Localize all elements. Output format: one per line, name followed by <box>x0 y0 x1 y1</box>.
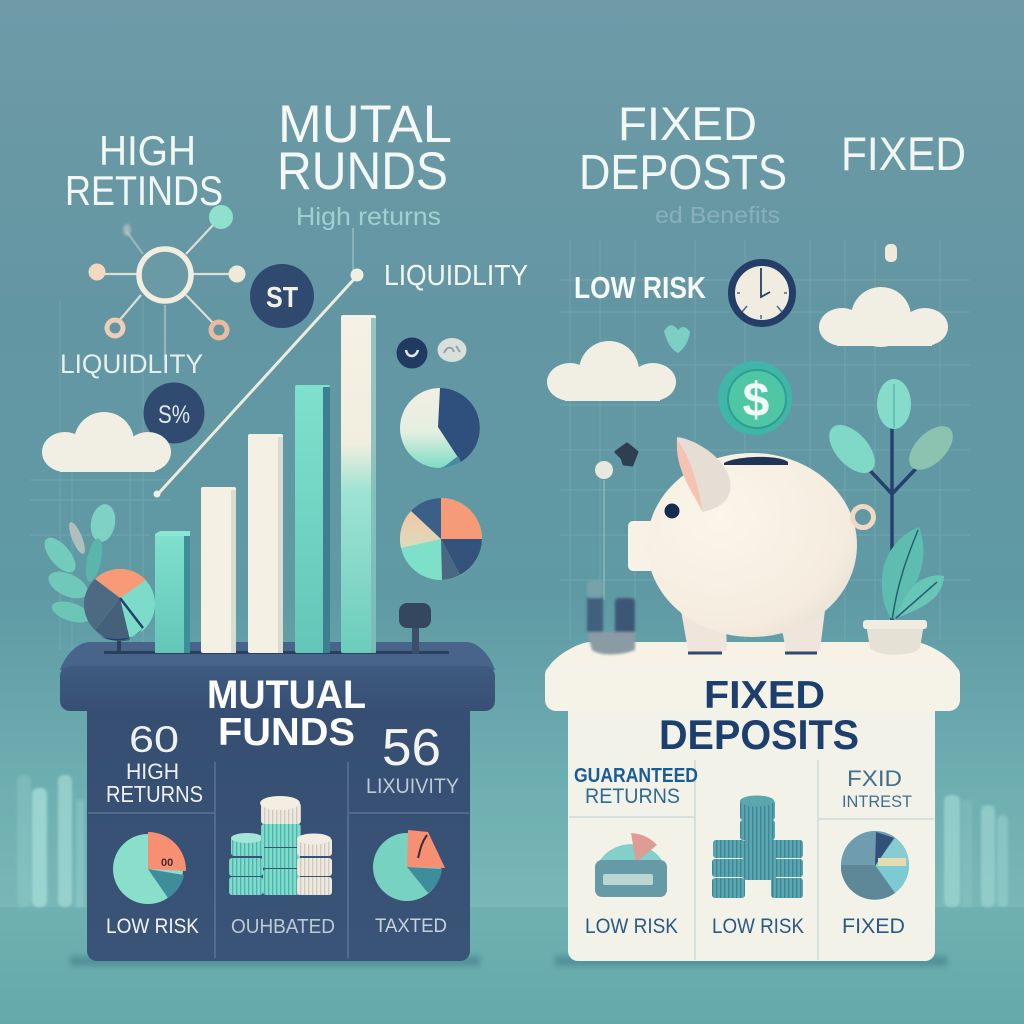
bar 4 <box>295 385 330 653</box>
pedestal floor shadow <box>70 956 480 966</box>
title: mutual funds <box>207 673 366 754</box>
labels: bottom row: OUHBATED <box>231 916 335 938</box>
pig ear <box>677 437 730 512</box>
title: mutual funds: MUTUAL <box>207 673 366 717</box>
panel: mutual funds upper area <box>39 95 528 654</box>
title: fixed deposits: FIXED <box>704 674 825 717</box>
heading: fixed deposits <box>579 97 787 200</box>
pedestal box <box>87 700 470 961</box>
pie chart: fixed <box>841 831 909 900</box>
coin slot <box>724 457 788 465</box>
heading: fixed deposits: FIXED <box>618 97 757 150</box>
floor band <box>0 907 1024 1024</box>
cloud right <box>819 287 948 347</box>
pie chart: taxed <box>373 830 445 901</box>
stat: guaranteed returns <box>574 765 698 808</box>
icon: bottles <box>587 580 635 654</box>
stat: guaranteed returns: GUARANTEED <box>574 765 698 787</box>
stat: fixed interest: INTREST <box>842 792 912 811</box>
labels: bottom row <box>585 915 905 938</box>
icon: safe with pie <box>595 833 667 897</box>
stat: 56 liquidity: LIXUIVITY <box>366 775 459 798</box>
coin stacks: left panel <box>229 796 332 895</box>
icon: small drop <box>885 244 897 262</box>
icon: dollar badge top <box>250 264 314 328</box>
bar 2 <box>201 487 236 653</box>
labels: bottom row <box>106 915 447 938</box>
pie chart upper right <box>400 388 480 468</box>
label: low risk: LOW RISK <box>574 270 707 305</box>
bar chart <box>155 315 376 653</box>
stat: 56 liquidity <box>366 719 459 798</box>
pie chart: low risk <box>113 832 186 904</box>
trend line <box>154 228 364 498</box>
stat: 60 high returns: HIGH <box>126 759 179 784</box>
heading: fixed deposits: DEPOSTS <box>579 146 787 200</box>
icon: dollar coin <box>718 361 792 435</box>
signpost <box>399 603 431 654</box>
stat: 56 liquidity: 56 <box>382 719 441 777</box>
heading: mutual runds: RUNDS <box>277 142 448 201</box>
bar 5 <box>341 315 376 653</box>
panel: mutual funds pedestal <box>60 642 495 966</box>
labels: bottom row: LOW RISK <box>106 915 199 938</box>
pig inner ear <box>677 440 702 511</box>
heading: high returns: RETINDS <box>65 167 223 214</box>
labels: bottom row: LOW RISK <box>712 915 804 938</box>
pedestal shadow line <box>104 651 449 654</box>
icon: dollar badge lower <box>144 382 204 444</box>
icon: small dark badge <box>396 338 428 368</box>
pedestal top surface <box>548 642 957 690</box>
icon: dollar badge lower: S% <box>158 401 190 429</box>
icon: network diagram <box>88 205 246 360</box>
icon: small heart <box>664 325 690 353</box>
cloud left <box>42 412 171 472</box>
subheading: fixed benefits: ed Benefits <box>655 202 780 228</box>
pig eye <box>664 504 680 518</box>
piggy bank <box>628 437 874 654</box>
plant right <box>821 379 961 620</box>
heading: fixed right: FIXED <box>841 127 966 180</box>
pig feet shadow <box>688 652 817 654</box>
background grid and faint bars <box>17 240 1008 907</box>
stat: fixed interest <box>842 766 912 811</box>
title: mutual funds: FUNDS <box>218 711 355 754</box>
heading: high returns <box>65 127 223 214</box>
heading: mutual runds <box>277 95 452 201</box>
pie chart lower right <box>400 498 482 580</box>
heading: high returns: HIGH <box>99 127 196 174</box>
plant pot <box>863 620 927 655</box>
pedestal floor shadow <box>555 956 947 966</box>
pedestal top surface <box>60 642 495 670</box>
labels: bottom row: FIXED <box>842 915 905 938</box>
subheading: high returns: High returns <box>296 203 441 231</box>
pig snout <box>628 521 668 571</box>
pie chart on stem <box>84 569 155 654</box>
icon: small grey badge <box>438 338 466 362</box>
labels: bottom row: LOW RISK <box>585 915 678 938</box>
pedestal slab <box>545 664 960 711</box>
panel: fixed deposits upper area <box>547 97 966 655</box>
coin stacks: center panel <box>712 796 803 898</box>
pie chart: low risk: 00 <box>161 857 173 869</box>
title: fixed deposits <box>659 674 859 758</box>
icon: dollar coin: $ <box>743 374 770 427</box>
pig tail <box>852 506 874 528</box>
panel: fixed deposits pedestal <box>545 642 960 966</box>
pig body <box>647 453 857 637</box>
stat: guaranteed returns: RETURNS <box>585 785 680 808</box>
stat: fixed interest: FXID <box>847 766 902 791</box>
label: liquidity left: LIQUIDLITY <box>60 349 203 379</box>
stat: 60 high returns <box>106 719 203 807</box>
label: liquidity right: LIQUIDLITY <box>384 260 528 292</box>
icon: dollar badge top: ST <box>266 282 298 314</box>
pedestal box <box>568 700 935 961</box>
plant left <box>39 502 118 627</box>
pig legs <box>680 605 825 654</box>
icon: clock <box>732 262 792 324</box>
bar 1 <box>155 531 190 653</box>
heading: mutual runds: MUTAL <box>278 95 452 154</box>
stat: 60 high returns: RETURNS <box>106 781 203 807</box>
icon: small pin and blob <box>595 444 637 600</box>
table dividers <box>88 762 469 958</box>
labels: bottom row: TAXTED <box>375 916 447 937</box>
pedestal slab <box>60 666 495 711</box>
bar 3 <box>248 434 283 653</box>
cloud center <box>547 341 676 401</box>
stat: 60 high returns: 60 <box>129 719 179 760</box>
table dividers <box>569 760 934 960</box>
title: fixed deposits: DEPOSITS <box>659 711 859 758</box>
